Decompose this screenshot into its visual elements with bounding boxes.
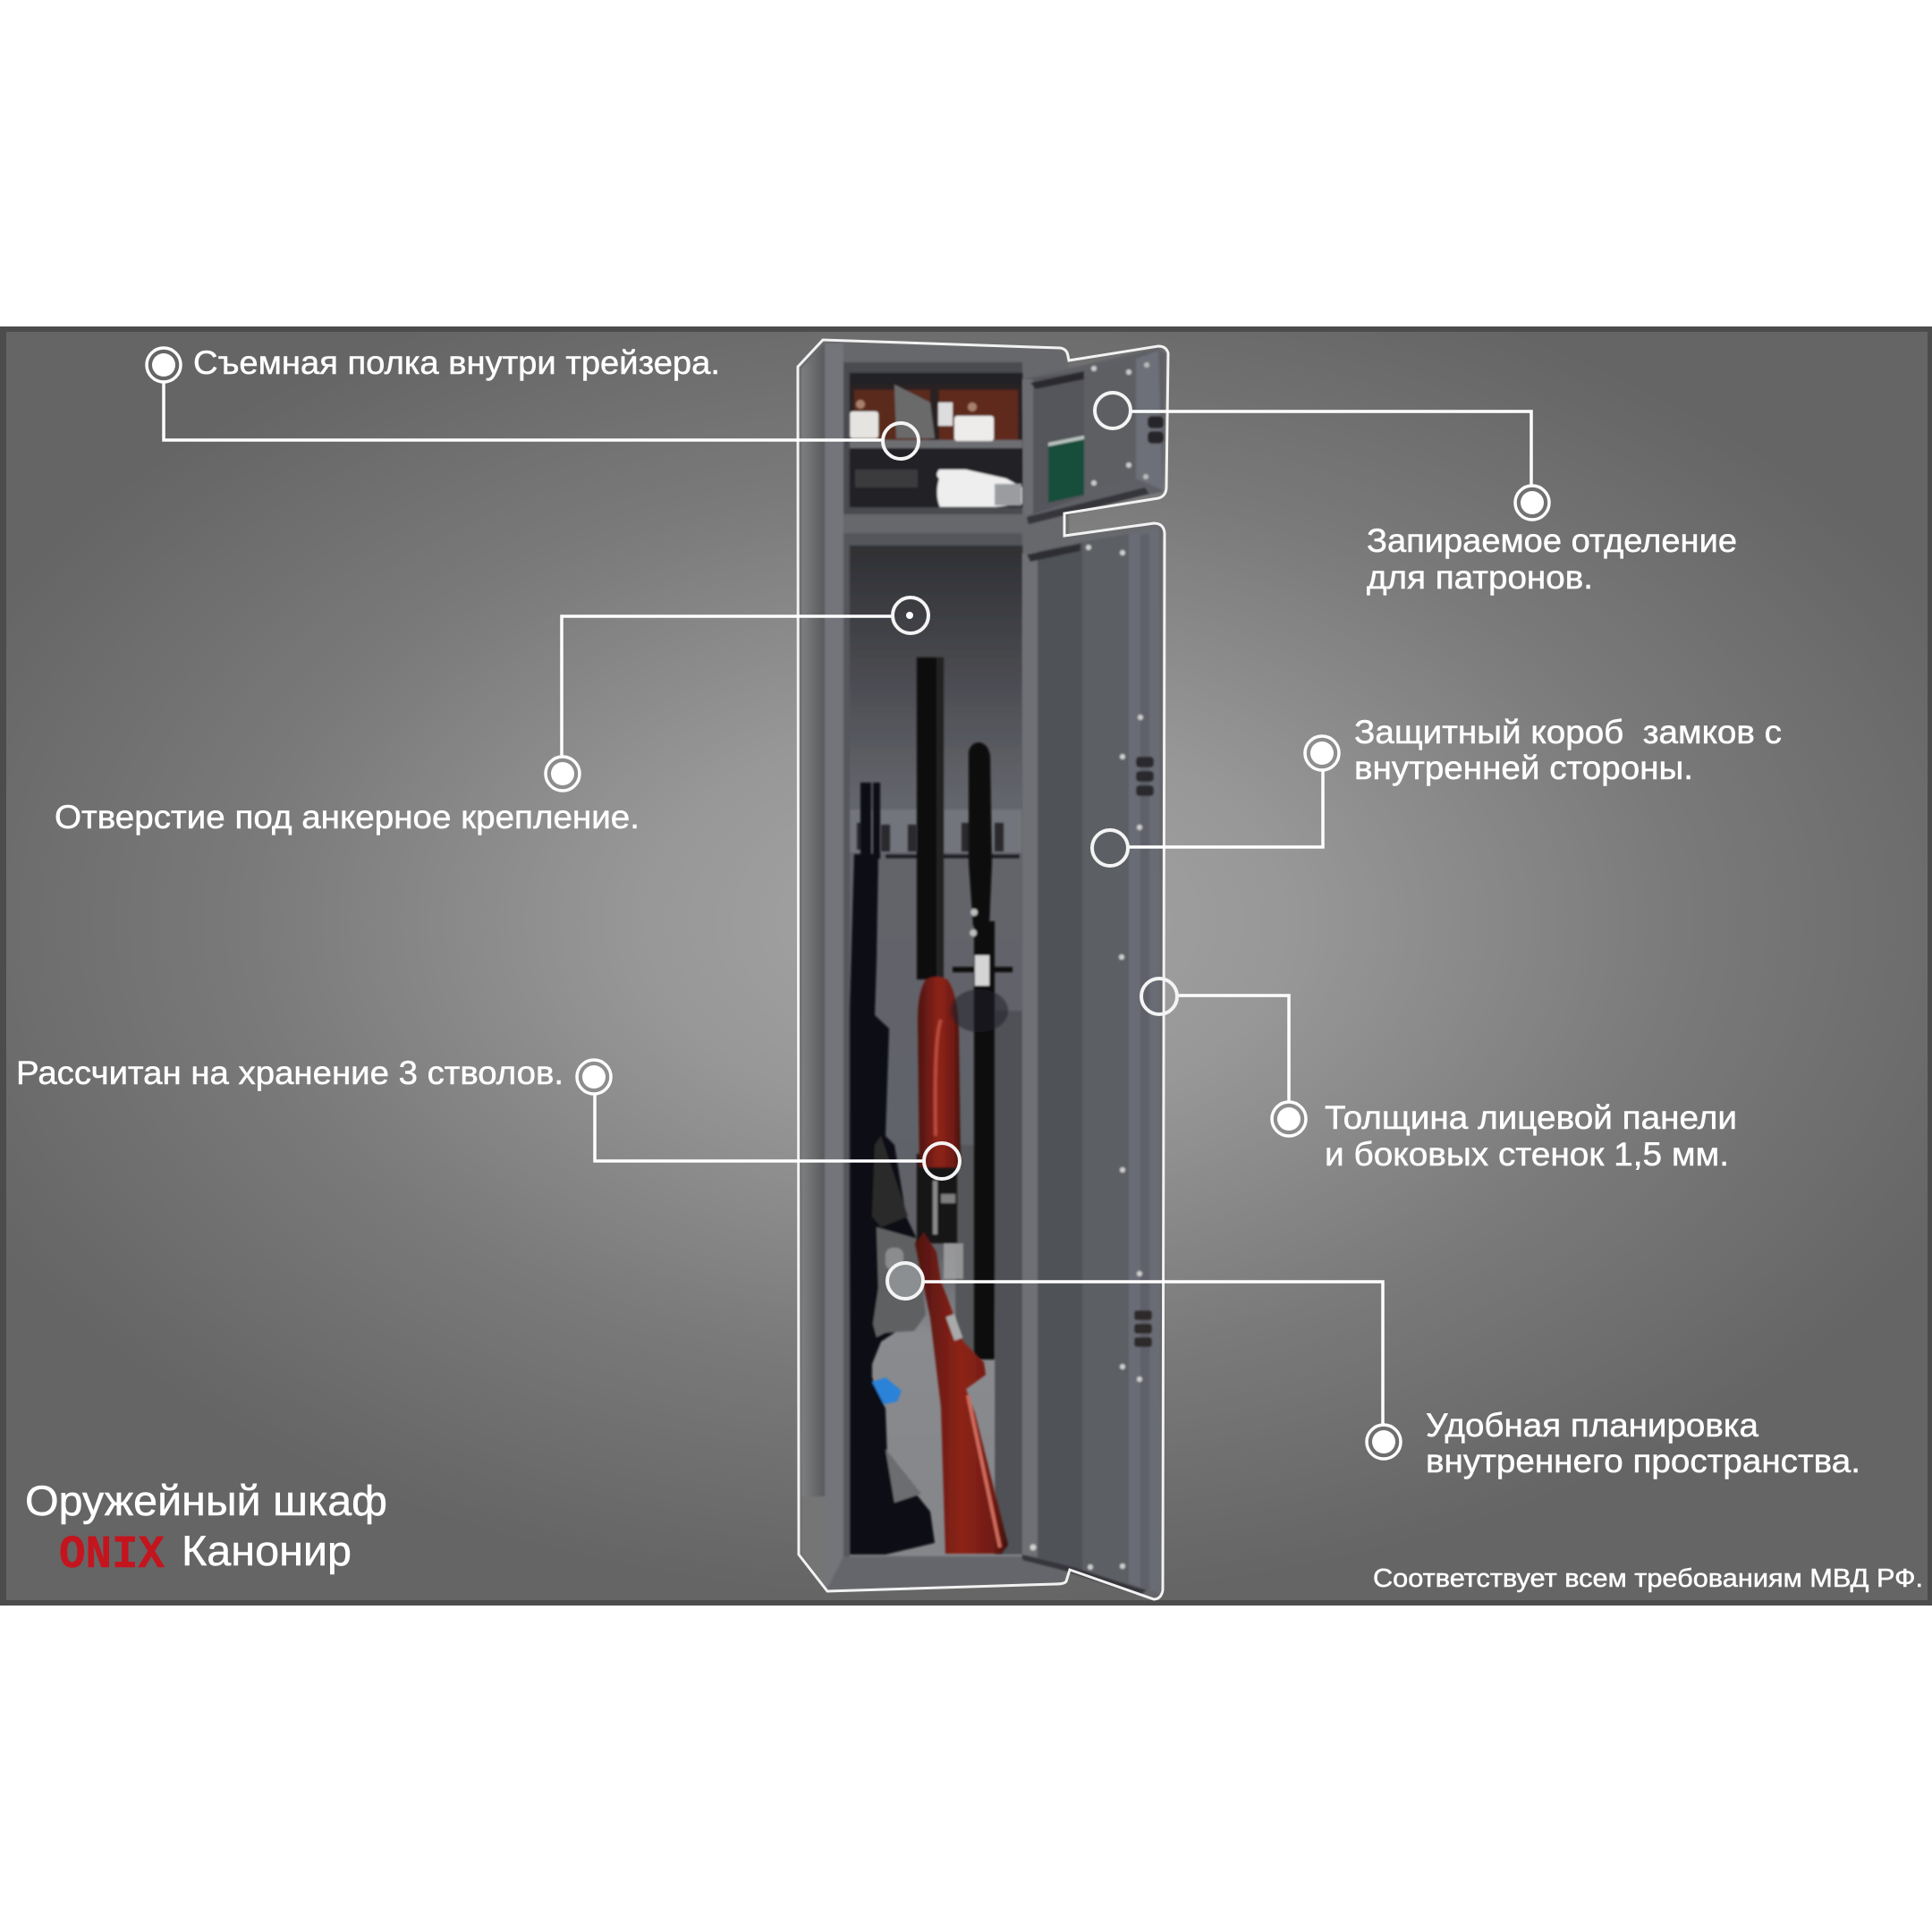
callout: convenient layout: внутреннего пространства. (1426, 1443, 1860, 1479)
background panel (0, 326, 1932, 1606)
upper door with lock compartment (1022, 348, 1165, 546)
callout: removable shelf (147, 344, 919, 459)
callout: anchor hole (55, 597, 928, 835)
callout: convenient layout: Удобная планировка (1426, 1407, 1758, 1444)
left rifle (850, 783, 935, 1555)
cabinet white outline (798, 340, 1168, 1599)
title: ONIX (59, 1529, 165, 1581)
callout: protective lock box (1092, 714, 1782, 866)
upper compartment with cartridges (850, 373, 1022, 507)
right sword rod (951, 742, 1013, 1360)
callout: protective lock box: Защитный короб замков с (1354, 714, 1782, 750)
callout: panel thickness: и боковых стенок 1,5 мм. (1325, 1136, 1729, 1173)
lock bolts lower (1134, 1310, 1152, 1347)
callout: convenient layout (887, 1263, 1860, 1479)
callout: lockable cartridge compartment: для патронов. (1367, 559, 1593, 596)
title: Канонир (182, 1527, 352, 1574)
callout: lockable cartridge compartment (1095, 393, 1737, 596)
cabinet body (798, 340, 1069, 1591)
lock bolts upper (1136, 757, 1154, 796)
title: Оружейный шкаф (25, 1477, 387, 1524)
title (25, 1477, 387, 1581)
callout: storage of 3 barrels (16, 1055, 960, 1179)
callout: panel thickness (1141, 979, 1737, 1173)
callout: panel thickness: Толщина лицевой панели (1325, 1099, 1737, 1136)
lower door (1022, 527, 1165, 1599)
callout: removable shelf: Съемная полка внутри трейзера. (193, 344, 720, 381)
callout: storage of 3 barrels: Рассчитан на хранение 3 стволов. (16, 1055, 564, 1091)
callout: protective lock box: внутренней стороны. (1354, 750, 1693, 786)
compliance note: Соответствует всем требованиям МВД РФ. (1373, 1564, 1923, 1593)
cabinet illustration (798, 340, 1168, 1599)
double barrel shotgun (917, 657, 961, 1243)
callout: anchor hole: Отверстие под анкерное крепление. (55, 799, 640, 835)
lower compartment interior (850, 546, 1022, 1556)
callout: lockable cartridge compartment: Запираемое отделение (1367, 522, 1737, 559)
gun rack hooks (857, 823, 1004, 852)
shotgun stock (915, 1232, 1008, 1554)
